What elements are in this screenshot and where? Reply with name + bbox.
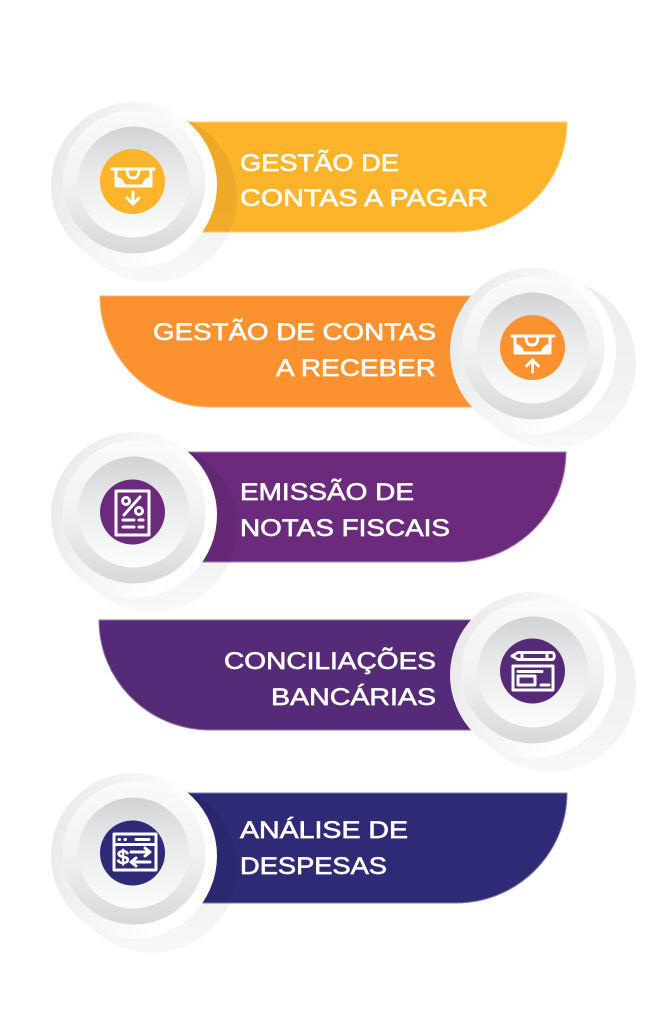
icon: cash down — [100, 149, 165, 214]
panel: emissão de notas fiscais — [51, 432, 566, 612]
heading: gestão de contas a receber — [153, 319, 436, 382]
heading: gestão de contas a pagar — [240, 150, 488, 212]
banner: purple — [170, 452, 566, 562]
heading: conciliações bancárias — [224, 647, 436, 711]
heading: análise de despesas — [240, 817, 408, 880]
icon: cash up — [500, 315, 565, 380]
badge shadow — [67, 442, 237, 612]
panel: conciliações bancárias — [99, 592, 636, 772]
badge shadow — [67, 783, 237, 953]
heading: conciliações bancárias: BANCÁRIAS — [271, 684, 436, 711]
heading: gestão de contas a receber: A RECEBER — [276, 355, 436, 382]
badge — [51, 432, 217, 598]
icon: pencil and card — [500, 638, 565, 704]
badge shadow — [67, 112, 237, 282]
heading: gestão de contas a receber: GESTÃO DE CONTAS — [153, 319, 436, 346]
banner: orange — [100, 296, 490, 407]
heading: análise de despesas: DESPESAS — [240, 853, 387, 880]
icon: browser exchange — [100, 820, 165, 886]
panel: gestão de contas a pagar — [51, 102, 567, 282]
badge shadow — [466, 278, 636, 448]
panel: análise de despesas — [51, 773, 567, 953]
heading: emissão de notas fiscais — [240, 479, 450, 542]
banner: dark purple — [99, 620, 490, 730]
badge shadow — [466, 602, 636, 772]
banner: navy — [170, 793, 567, 903]
badge — [51, 773, 217, 939]
heading: conciliações bancárias: CONCILIAÇÕES — [224, 647, 436, 675]
heading: gestão de contas a pagar: GESTÃO DE — [240, 150, 399, 177]
badge — [450, 268, 616, 434]
icon: browser exchange: $ — [117, 848, 129, 869]
heading: emissão de notas fiscais: EMISSÃO DE — [240, 479, 414, 506]
banner: yellow — [170, 122, 567, 232]
heading: emissão de notas fiscais: NOTAS FISCAIS — [240, 515, 450, 542]
badge — [51, 102, 217, 268]
heading: gestão de contas a pagar: CONTAS A PAGAR — [240, 185, 488, 212]
panel: gestão de contas a receber — [100, 268, 636, 448]
badge — [450, 592, 616, 758]
icon: tax document — [100, 480, 165, 544]
heading: análise de despesas: ANÁLISE DE — [240, 817, 408, 844]
